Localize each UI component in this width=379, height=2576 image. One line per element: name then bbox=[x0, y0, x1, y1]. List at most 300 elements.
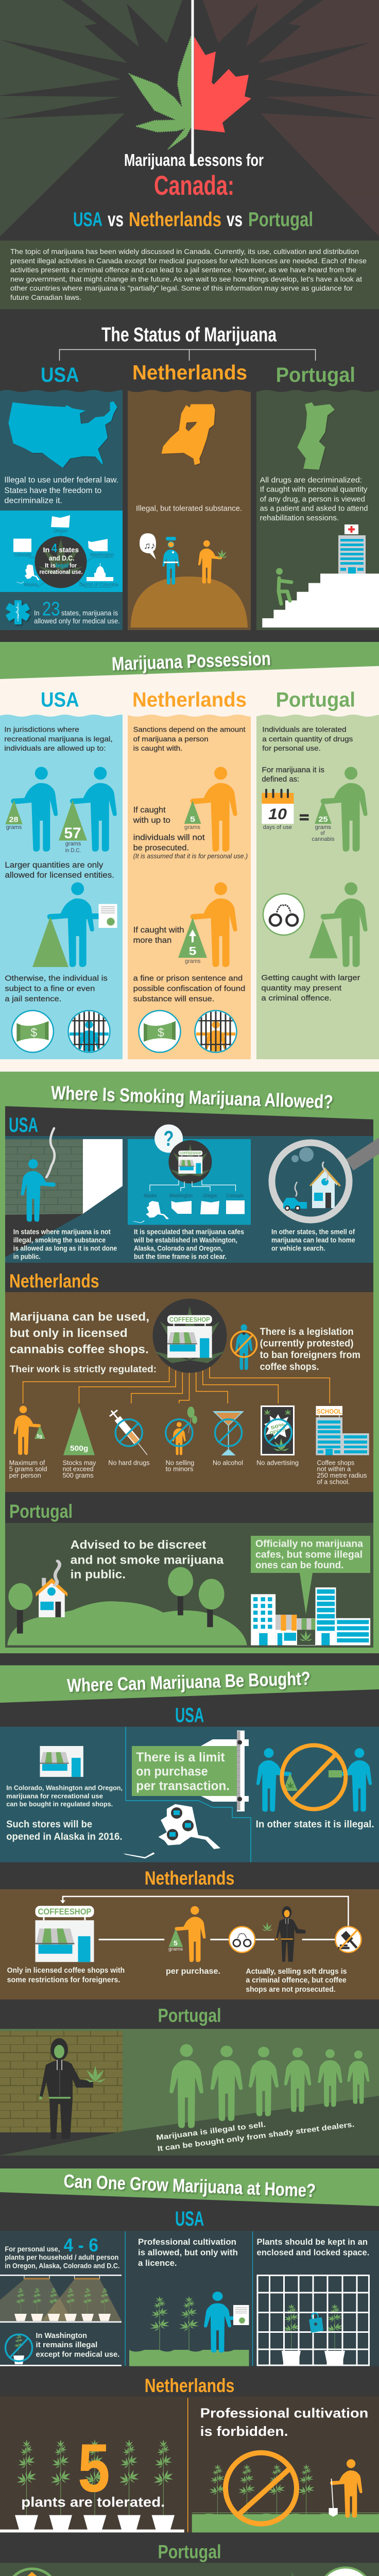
icon: person 5 grams bbox=[168, 1906, 205, 1962]
text: other states illegal: In other states it is illegal. bbox=[256, 1819, 374, 1830]
text: defined as: For marijuana it is bbox=[262, 766, 324, 774]
icon: licensed person bbox=[32, 882, 117, 967]
text: ban foreigners: to ban foreigners from bbox=[260, 1350, 360, 1361]
cream background bbox=[0, 642, 379, 1072]
label Netherlands: Netherlands bbox=[9, 1270, 99, 1292]
text: criminal offence: Getting caught with larger bbox=[261, 974, 360, 982]
icon: calendar 10 days bbox=[262, 790, 294, 831]
icon: person with 57 grams: in D.C. bbox=[65, 848, 81, 854]
text: decriminalized: of any drug, a person is viewed bbox=[260, 496, 365, 504]
text: if caught with up to bbox=[133, 806, 170, 825]
text: if caught with up to: with up to bbox=[133, 816, 170, 825]
text: smell search: or vehicle search. bbox=[271, 1245, 325, 1252]
text: regulation captions: not within a bbox=[317, 1465, 351, 1472]
decorative green rays bbox=[0, 0, 182, 236]
icon: 500g stock: 500g bbox=[70, 1444, 88, 1453]
icon: banned street deal bbox=[256, 1745, 372, 1811]
panel: USA status bbox=[0, 390, 123, 630]
text: sanctions bbox=[133, 725, 246, 752]
text: Alaska 2016: opened in Alaska in 2016. bbox=[6, 1832, 123, 1842]
intro text: present illegal activities in Canada except for medical purposes for which licences are needed. Each of these bbox=[10, 257, 367, 265]
dark circle with text: and D.C. bbox=[49, 554, 74, 562]
text: regulation captions: Coffee shops bbox=[317, 1459, 355, 1466]
text: 4 to 6 plants: 4 - 6 bbox=[64, 2234, 98, 2256]
illustration: person smoking by wall bbox=[5, 1128, 123, 1257]
text: defined as bbox=[262, 766, 324, 784]
text: regulated shops: can be bought in regulated shops. bbox=[6, 1800, 113, 1808]
section: can one grow marijuana at home bbox=[0, 2168, 379, 2576]
panel: Portugal growing bbox=[0, 2563, 379, 2576]
text: allowed amount: recreational marijuana is legal, bbox=[4, 735, 113, 743]
text: allowed amount bbox=[4, 725, 113, 752]
icon: person with 28 grams: 28 bbox=[9, 815, 19, 824]
text: regulation captions: of a school. bbox=[317, 1478, 350, 1486]
connector lines bbox=[23, 1366, 330, 1403]
text: 4 to 6 plants: in Oregon, Alaska, Colorado and D.C. bbox=[5, 2262, 119, 2270]
icon: person with more than 5 grams: 5 bbox=[188, 945, 197, 958]
dark circle with text: In bbox=[43, 546, 49, 554]
callout: 4 states and DC: Washington bbox=[90, 552, 114, 558]
text: professional cultivation bbox=[138, 2237, 238, 2268]
text: 4 to 6 plants bbox=[5, 2234, 119, 2270]
title bbox=[73, 150, 313, 231]
text: smell search bbox=[271, 1228, 355, 1252]
text: forbidden bbox=[200, 2405, 368, 2439]
text: speculated cafes: will be established in Washington, bbox=[133, 1236, 237, 1244]
icon: Colorado bbox=[13, 539, 31, 552]
text: 4 to 6 plants: For personal use, bbox=[5, 2245, 60, 2253]
heading: The Status of Marijuana bbox=[101, 324, 277, 346]
text: regulated shops: marijuana for recreational use bbox=[6, 1792, 103, 1800]
icon: person with leaf bbox=[198, 540, 228, 584]
icon: leaf on shop bbox=[299, 1630, 313, 1641]
callout: 4 states and DC: Colorado bbox=[14, 552, 31, 558]
text: smell search: In other states, the smell of bbox=[271, 1228, 355, 1236]
text: if caught with up to: If caught bbox=[133, 806, 166, 815]
text: more than bbox=[133, 926, 184, 945]
label USA: USA bbox=[175, 2208, 204, 2230]
text: criminal offence bbox=[261, 974, 360, 1003]
icon: speech bubble with notes: ♫♪ bbox=[144, 540, 156, 551]
text: licensed coffee shops bbox=[10, 1310, 157, 1375]
arrow: leads to prosecution bbox=[144, 2572, 312, 2576]
illustration: marijuana cafes: Oregon bbox=[203, 1193, 217, 1199]
text: 23 states: In bbox=[34, 609, 39, 617]
text: federal law: decriminalize it. bbox=[4, 496, 62, 505]
text: Washington: it remains illegal bbox=[36, 2341, 97, 2349]
text: Washington: except for medical use. bbox=[36, 2350, 119, 2359]
text: forbidden: is forbidden. bbox=[200, 2424, 288, 2439]
text: not prosecuted: individuals will not bbox=[133, 834, 205, 842]
text: illegal to sell: Marijuana is illegal to sell. bbox=[156, 2121, 266, 2142]
text: ban foreigners: There is a legislation bbox=[260, 1327, 354, 1337]
text: not in public: In states where marijuana is not bbox=[13, 1228, 111, 1236]
panel: Netherlands growing bbox=[0, 2397, 379, 2533]
text: Washington bbox=[36, 2331, 119, 2359]
text: licensed coffee shops: but only in licensed bbox=[10, 1326, 128, 1340]
icon: person with 28 grams bbox=[5, 767, 58, 852]
label Portugal: Portugal bbox=[158, 2541, 221, 2562]
text: federal law: States have the freedom to bbox=[4, 486, 101, 495]
text: Washington: In Washington bbox=[36, 2331, 87, 2340]
callout: limit on purchase bbox=[132, 1746, 237, 1796]
icon: person 5 grams: grams bbox=[168, 1946, 183, 1952]
text: regulated shops bbox=[6, 1784, 123, 1808]
text: licensed shops: Only in licensed coffee shops with bbox=[7, 1967, 125, 1975]
heading: Can One Grow Marijuana at Home? bbox=[63, 2171, 316, 2201]
icon: 5 grams per person bbox=[13, 1406, 45, 1455]
text: not in public: illegal, smoking the substance bbox=[13, 1236, 106, 1244]
heading: Marijuana Possession bbox=[111, 648, 271, 674]
text: fine or prison bbox=[133, 974, 245, 1003]
illustration: marijuana cafes: Washington bbox=[169, 1193, 193, 1199]
panel: Portugal buying bbox=[0, 2029, 379, 2156]
text: licensed coffee shops: cannabis coffee shops. bbox=[10, 1342, 149, 1355]
title: vs bbox=[108, 209, 124, 231]
panel: USA possession bbox=[0, 715, 123, 1070]
icon: fine bbox=[139, 1011, 180, 1052]
panel: Netherlands status bbox=[128, 390, 251, 630]
section: marijuana possession bbox=[0, 642, 379, 1072]
icon: climbing person bbox=[276, 568, 291, 604]
stat: 5 plants: 5 bbox=[78, 2430, 110, 2506]
text: 23 states: allowed only for medical use. bbox=[34, 617, 120, 625]
text: licensed shops: some restrictions for foreigners. bbox=[7, 1976, 120, 1985]
icon: coffee shop bbox=[35, 1906, 94, 1962]
text: fine or prison: a fine or prison sentence and bbox=[133, 974, 243, 982]
icon: no selling to minors bbox=[166, 1406, 197, 1455]
icon: person with 25 grams: 25 bbox=[318, 815, 328, 824]
text: decriminalized: If caught with personal quantity bbox=[260, 486, 368, 494]
text: federal law: Illegal to use under federal law. bbox=[4, 476, 118, 484]
text: 23 states: 23 bbox=[42, 599, 60, 620]
text: more than: more than bbox=[133, 936, 171, 945]
icon: hooded dealer bbox=[262, 1906, 305, 1962]
text: not prosecuted: (It is assumed that it is for personal use.) bbox=[133, 853, 248, 860]
icon: mound bbox=[131, 577, 248, 628]
callout: illegal cafes: Officially no marijuana bbox=[255, 1538, 363, 1550]
icon: foreigner ban bbox=[231, 1324, 257, 1370]
arrow: flow back to coffee shop bbox=[61, 1896, 348, 1926]
icon: no advertising: OFF!!!! bbox=[269, 1427, 286, 1436]
callout: limit on purchase: per transaction. bbox=[136, 1778, 230, 1793]
text: fine or prison: possible confiscation of found bbox=[133, 984, 245, 993]
title: Netherlands bbox=[129, 209, 221, 231]
banner bbox=[0, 1665, 379, 1703]
panel: Portugal status bbox=[256, 390, 379, 630]
hero panel bbox=[0, 0, 379, 236]
icon: Alaska with shops bbox=[123, 1804, 220, 1858]
text: regulated shops: In Colorado, Washington and Oregon, bbox=[6, 1784, 123, 1792]
map: USA bbox=[8, 401, 117, 468]
intro text: other countries where marijuana is "partially" legal. Some of this information may serve as guidance for bbox=[10, 284, 353, 292]
dark circle with text: for bbox=[70, 563, 77, 569]
country labels: Netherlands bbox=[132, 688, 247, 711]
text: locked space: enclosed and locked space. bbox=[256, 2247, 369, 2258]
dark circle with text: legal bbox=[56, 563, 68, 569]
title: Canada: bbox=[154, 171, 234, 201]
icon: person with 57 grams: 57 bbox=[64, 825, 81, 842]
section: where can marijuana be bought bbox=[0, 1665, 379, 2156]
text: licensed coffee shops: Marijuana can be used, bbox=[10, 1310, 149, 1323]
text: larger quantities: Larger quantities are only bbox=[5, 861, 104, 870]
icon: person with 25 grams: grams bbox=[315, 824, 332, 831]
icon: hooded street dealer bbox=[39, 2038, 106, 2139]
text: regulation captions: 5 grams sold bbox=[9, 1465, 47, 1472]
text: criminal offence bbox=[246, 1968, 347, 1994]
icon: no alcohol bbox=[213, 1411, 244, 1455]
text: licensed coffee shops: Their work is strictly regulated: bbox=[10, 1363, 157, 1375]
text: otherwise: a jail sentence. bbox=[5, 994, 61, 1003]
illustration: marijuana cafes: ? bbox=[164, 1126, 174, 1150]
icon: handcuffs bbox=[229, 1927, 255, 1953]
callout: limit on purchase: There is a limit bbox=[136, 1750, 225, 1765]
text: not in public: is allowed as long as it is not done bbox=[13, 1245, 117, 1252]
icon: banned plant bbox=[6, 2334, 32, 2364]
text: regulation captions: Maximum of bbox=[9, 1459, 45, 1466]
panel: Portugal smoking bbox=[5, 1523, 373, 1648]
text: professional cultivation: a licence. bbox=[138, 2258, 177, 2268]
text: allowed amount: individuals are allowed up to: bbox=[4, 744, 106, 752]
country labels: USA bbox=[41, 688, 79, 711]
icon: receipt ruler bbox=[201, 1731, 249, 1811]
icon: coffee shop circle bbox=[152, 1299, 227, 1373]
icon: no prosecution bbox=[335, 1927, 361, 1953]
callout: illegal cafes bbox=[251, 1536, 370, 1615]
icon: fine bbox=[12, 1011, 54, 1052]
text: professional cultivation: Professional cultivation bbox=[138, 2237, 236, 2247]
text: not in public: in public. bbox=[13, 1253, 41, 1261]
intro text: The topic of marijuana has been widely discussed in Canada. Currently, its use, cultivation and distribution bbox=[10, 247, 359, 256]
section: the status of marijuana bbox=[0, 324, 379, 630]
icon: gavel bbox=[319, 2568, 372, 2576]
icon: no advertising: 50% bbox=[270, 1422, 285, 1431]
text: regulation captions: No hard drugs bbox=[108, 1459, 150, 1466]
country labels: USA bbox=[41, 364, 79, 386]
callout: limit on purchase: on purchase bbox=[136, 1764, 208, 1778]
country labels bbox=[41, 362, 355, 386]
intro panel bbox=[0, 241, 379, 309]
icon: police officer bbox=[163, 537, 179, 585]
text: regulation captions: Stocks may bbox=[63, 1459, 96, 1466]
icon: person with 5 grams: grams bbox=[184, 824, 201, 831]
decorative red rays bbox=[203, 0, 379, 236]
icon: hospital bbox=[338, 524, 366, 574]
title: Portugal bbox=[248, 209, 313, 231]
text: sanctions: is caught with. bbox=[133, 744, 182, 752]
text: more than: If caught with bbox=[133, 926, 184, 935]
icon: person with handcuffs circle bbox=[263, 882, 368, 967]
panel: Netherlands possession bbox=[128, 715, 251, 1070]
text: locked space bbox=[256, 2237, 369, 2258]
text: 23 states: states, marijuana is bbox=[61, 609, 118, 617]
icon: calendar 10 days: days of use bbox=[263, 824, 292, 831]
text: licensed shops bbox=[7, 1967, 125, 1985]
text: regulation captions: No alcohol bbox=[213, 1459, 243, 1466]
text: tolerated: Illegal, but tolerated substance. bbox=[136, 504, 242, 513]
title: vs bbox=[227, 209, 243, 231]
map: Netherlands bbox=[162, 404, 215, 465]
illustration: licensed grower bbox=[129, 2292, 249, 2366]
callout: 4 states and DC: Oregon bbox=[54, 529, 67, 534]
icon: school: SCHOOL bbox=[317, 1408, 342, 1415]
dark circle with text: recreational use. bbox=[39, 569, 82, 575]
intro text bbox=[10, 247, 367, 301]
title: USA bbox=[73, 209, 102, 231]
text: 23 states bbox=[34, 599, 120, 625]
divider line between leaves bbox=[192, 0, 194, 166]
map: Portugal bbox=[297, 402, 335, 470]
country labels bbox=[41, 688, 355, 711]
section: where is smoking allowed bbox=[0, 1072, 379, 1653]
text: tolerated quantity: a certain quantity of drugs bbox=[262, 735, 353, 743]
label Netherlands: Netherlands bbox=[145, 1868, 234, 1889]
text: locked space: Plants should be kept in an bbox=[256, 2237, 368, 2247]
icon: stairs bbox=[262, 573, 379, 628]
icon: half maple leaf bbox=[194, 37, 251, 132]
icon: 500g stock bbox=[63, 1406, 95, 1455]
dark circle with text: 4 bbox=[51, 541, 58, 555]
text: criminal offence: a criminal offence. bbox=[261, 994, 332, 1003]
illustration: locked enclosure bbox=[257, 2275, 369, 2366]
intro text: future Canadian laws. bbox=[10, 293, 81, 301]
text: regulation captions bbox=[9, 1459, 367, 1486]
icon: jail bbox=[195, 1011, 237, 1070]
illustration: grow shelf bbox=[0, 2275, 122, 2323]
text: illegal to sell: It can be bought only from shady street dealers. bbox=[157, 2121, 355, 2153]
intro text: activities presents a criminal offence and can lead to a jail sentence. However, as we have heard from the bbox=[10, 266, 356, 274]
panel: Netherlands buying bbox=[0, 1889, 379, 1999]
text: tolerated quantity: for personal use. bbox=[262, 744, 321, 752]
icon: person with more than 5 grams: grams bbox=[185, 958, 201, 964]
icon: person with 5 grams bbox=[184, 767, 237, 852]
decorative wave bbox=[0, 389, 379, 393]
text: fine or prison: substance will ensue. bbox=[133, 994, 214, 1003]
callout: 4 states and DC: District of Columbia bbox=[79, 582, 118, 588]
icon: Capitol bbox=[87, 563, 113, 581]
panel: Netherlands smoking bbox=[5, 1292, 373, 1492]
icon: calendar 10 days: 10 bbox=[268, 806, 287, 823]
banner bbox=[0, 2168, 379, 2206]
icon: person with 25 grams: cannabis bbox=[312, 836, 335, 842]
text: not prosecuted: be prosecuted. bbox=[133, 844, 189, 853]
text: allowed amount: In jurisdictions where bbox=[4, 725, 79, 734]
heading: Where Can Marijuana Be Bought? bbox=[67, 1668, 311, 1696]
country labels: Netherlands bbox=[132, 362, 247, 384]
text: ban foreigners bbox=[260, 1327, 360, 1372]
illustration: countryside and city bbox=[7, 1561, 370, 1646]
text: forbidden: Professional cultivation bbox=[200, 2405, 368, 2421]
text: otherwise bbox=[5, 974, 108, 1003]
intro text: new government, that might change in the future. As we wait to see how things develop, let's have a look at bbox=[10, 275, 362, 283]
text: otherwise: Otherwise, the individual is bbox=[5, 974, 108, 982]
text: tolerated quantity bbox=[262, 725, 353, 752]
text: smell search: marijuana can lead to home bbox=[271, 1236, 355, 1244]
label Portugal: Portugal bbox=[9, 1501, 73, 1522]
illustration: marijuana cafes bbox=[128, 1124, 251, 1225]
text: regulation captions: No selling bbox=[166, 1459, 194, 1466]
icon: jail bbox=[68, 1011, 110, 1070]
text: regulation captions: per person bbox=[9, 1471, 41, 1479]
icon: no hard drugs bbox=[110, 1410, 147, 1455]
callout: illegal cafes: cafes, but some illegal bbox=[255, 1549, 363, 1560]
icon: 5 grams per person: 5g bbox=[37, 1434, 42, 1439]
icon: Oregon bbox=[51, 515, 70, 528]
text: not in public bbox=[13, 1228, 117, 1261]
text: regulation captions: 500 grams bbox=[63, 1471, 94, 1479]
illustration: magnifying glass over home and car bbox=[272, 1138, 379, 1220]
text: defined as: defined as: bbox=[262, 775, 299, 784]
panel: Portugal possession bbox=[256, 715, 379, 1059]
text: 4 to 6 plants: plants per household / adult person bbox=[5, 2253, 118, 2261]
text: larger quantities: allowed for licensed entities. bbox=[5, 871, 114, 879]
label USA: USA bbox=[175, 1704, 204, 1727]
icon: person with 25 grams: of bbox=[320, 831, 325, 837]
icon: banned home grow bbox=[6, 2569, 58, 2576]
icon: Washington bbox=[88, 539, 108, 551]
label Portugal: Portugal bbox=[158, 2005, 221, 2026]
text: speculated cafes: It is speculated that marijuana cafes bbox=[134, 1228, 244, 1236]
text: decriminalized: rehabilitation sessions. bbox=[260, 514, 339, 522]
icon: person 5 grams: 5 bbox=[174, 1939, 178, 1947]
text: be discreet: in public. bbox=[71, 1567, 126, 1581]
dark circle with text bbox=[35, 536, 87, 588]
text: ban foreigners: coffee shops. bbox=[260, 1362, 319, 1372]
icon: line of people bbox=[169, 2044, 369, 2128]
text: criminal offence: quantity may present bbox=[261, 984, 342, 993]
text: speculated cafes: but the time frame is not clear. bbox=[134, 1253, 227, 1261]
illustration: forbidden field bbox=[192, 2453, 379, 2533]
text: decriminalized bbox=[260, 476, 368, 522]
icon: person with 5 grams: 5 bbox=[190, 815, 195, 824]
text: federal law bbox=[4, 476, 118, 505]
panel: USA growing bbox=[0, 2231, 379, 2366]
text: plants tolerated: plants are tolerated. bbox=[21, 2494, 165, 2510]
icon: Alaska bbox=[16, 564, 40, 584]
text: regulation captions: No advertising bbox=[256, 1459, 299, 1466]
icon: person with 57 grams bbox=[59, 767, 117, 854]
banner bbox=[0, 642, 379, 679]
callout: 4 states and DC: Alaska bbox=[24, 582, 38, 588]
icon: person with 57 grams: grams bbox=[65, 841, 81, 847]
text: Alaska 2016 bbox=[6, 1819, 123, 1842]
country labels: Portugal bbox=[276, 688, 355, 711]
illustration: marijuana cafes: Colorado bbox=[226, 1193, 244, 1199]
dark circle with text: states bbox=[59, 546, 79, 554]
text: decriminalized: as a patient and asked to attend bbox=[260, 505, 368, 513]
text: speculated cafes: Alaska, Colorado and Oregon, bbox=[134, 1245, 222, 1252]
text: be discreet: and not smoke marijuana bbox=[71, 1553, 223, 1566]
text: ban foreigners: (currently protested) bbox=[260, 1338, 354, 1349]
label USA: USA bbox=[9, 1114, 38, 1137]
text: tolerated quantity: Individuals are tolerated bbox=[262, 725, 347, 734]
text: professional cultivation: is allowed, but only with bbox=[138, 2247, 238, 2258]
callout: 4 states and DC bbox=[0, 511, 123, 592]
icon: half cannabis leaf bbox=[130, 37, 191, 149]
icon: person with 28 grams: grams bbox=[6, 824, 22, 831]
panel: USA buying bbox=[0, 1727, 379, 1862]
icon: person with 25 grams bbox=[312, 767, 368, 852]
text: criminal offence: shops are not prosecuted. bbox=[246, 1986, 336, 1994]
icon: speech bubble with notes bbox=[140, 533, 156, 560]
panel: USA smoking bbox=[5, 1114, 379, 1263]
label Netherlands: Netherlands bbox=[145, 2375, 234, 2396]
icon: school bbox=[316, 1406, 369, 1455]
text: speculated cafes bbox=[133, 1228, 244, 1261]
text: larger quantities bbox=[5, 861, 114, 879]
text: be discreet bbox=[71, 1538, 223, 1581]
dark circle with text: It is bbox=[45, 563, 56, 569]
